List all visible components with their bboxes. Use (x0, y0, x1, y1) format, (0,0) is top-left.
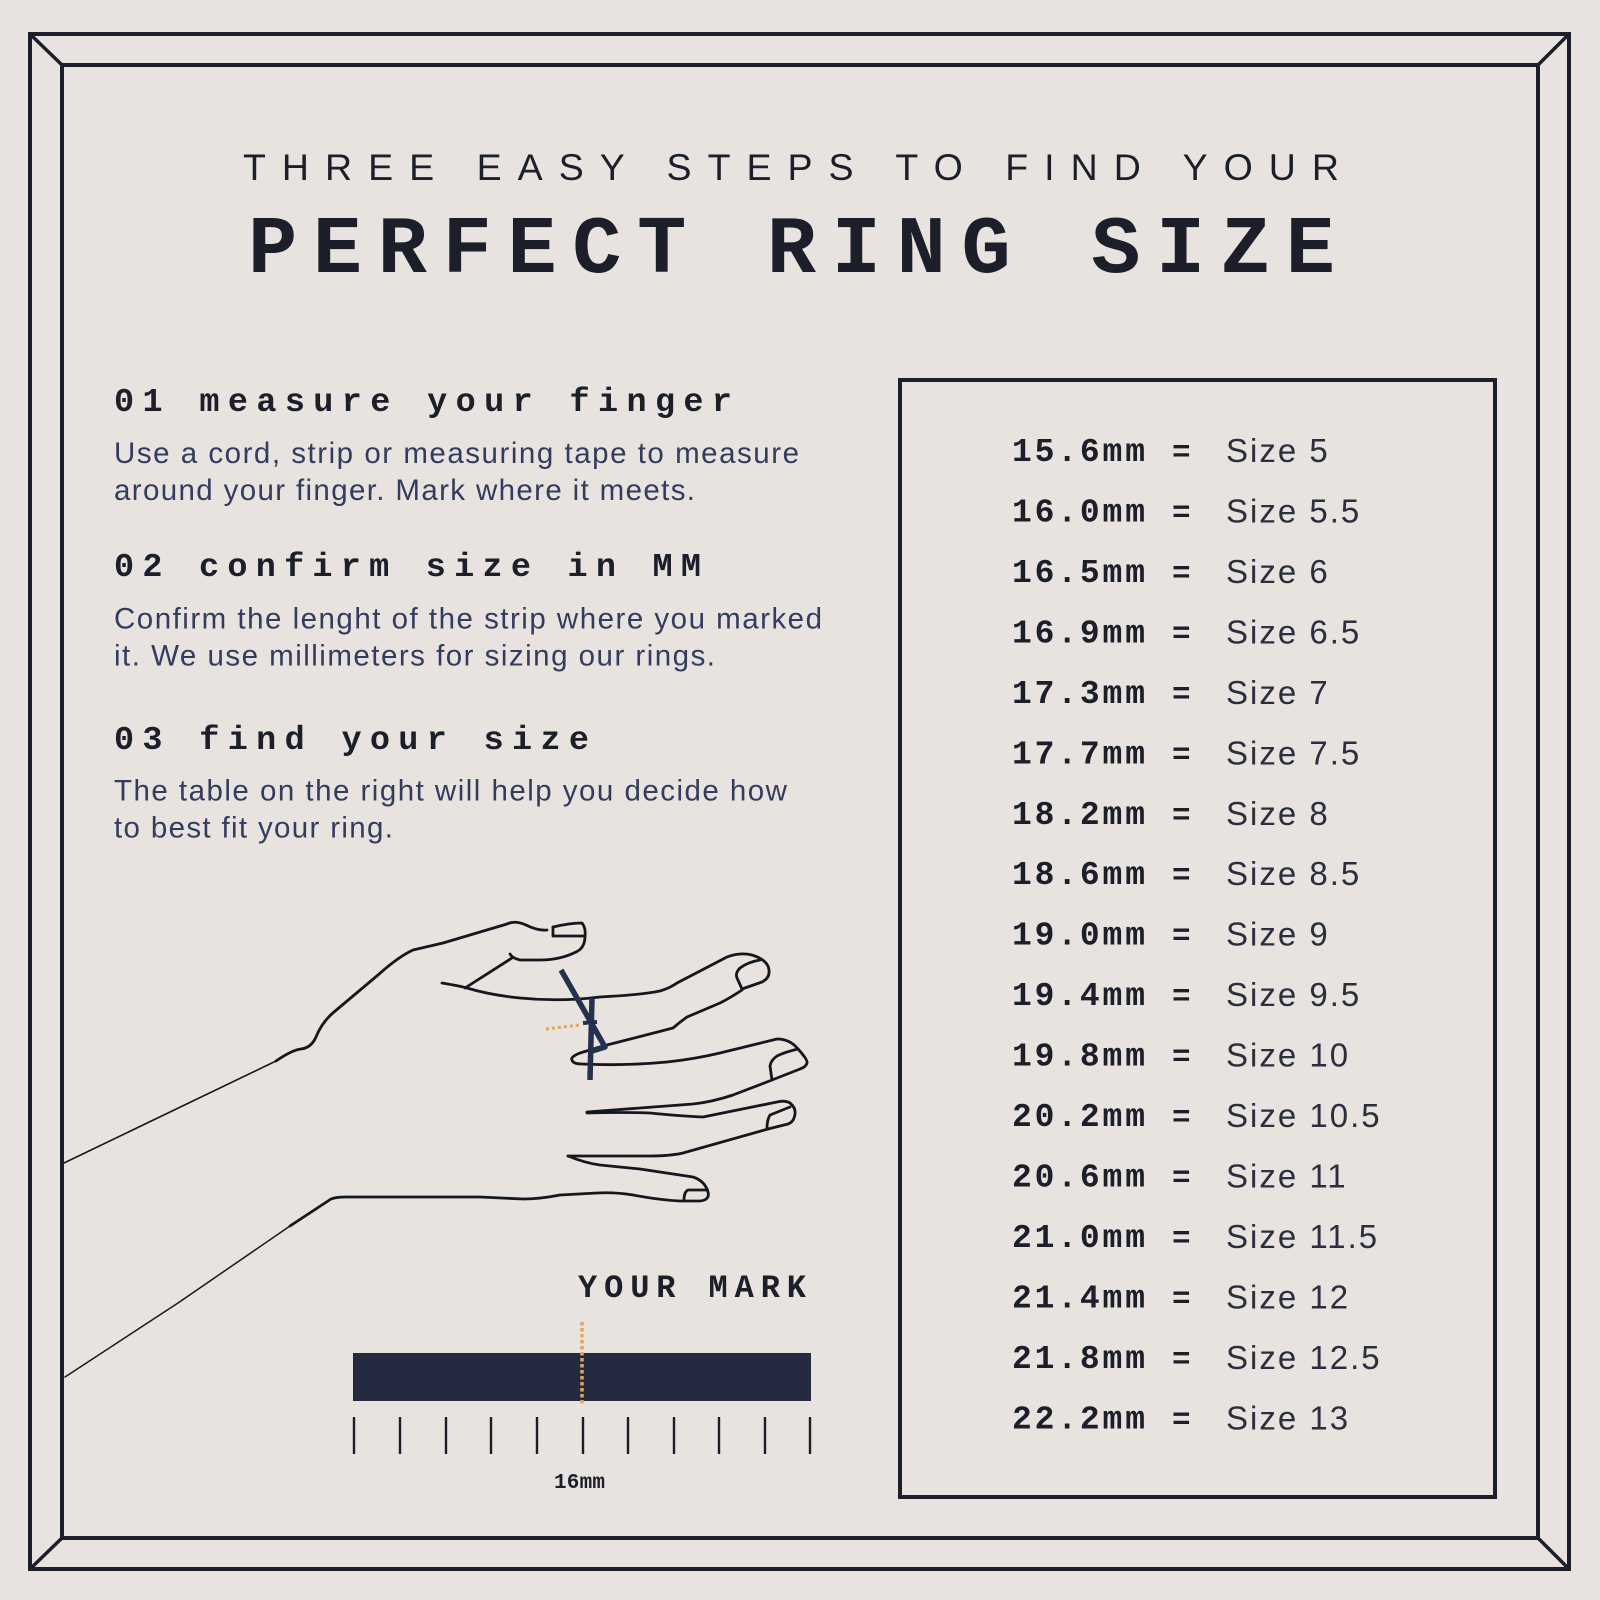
step 02 text: Confirm the lenght of the strip where you marked (114, 602, 822, 636)
step 01 (114, 384, 799, 507)
row: 18.2mm: = (1172, 799, 1191, 834)
row: 18.2mm (1012, 795, 1330, 834)
row: 22.2mm: = (1172, 1403, 1191, 1438)
row: 19.4mm: Size 9.5 (1226, 976, 1361, 1013)
row: 17.3mm: Size 7 (1226, 674, 1330, 711)
row: 19.8mm: 19.8mm (1012, 1039, 1145, 1076)
row: 20.6mm: 20.6mm (1012, 1160, 1145, 1196)
row: 18.2mm: Size 8 (1226, 795, 1330, 832)
main heading: PERFECT RING SIZE (248, 204, 1335, 297)
row: 17.3mm (1012, 674, 1330, 713)
ruler ticks (354, 1417, 810, 1454)
row: 20.6mm: Size 11 (1226, 1158, 1348, 1194)
row: 21.0mm: Size 11.5 (1226, 1218, 1379, 1255)
step 02 text line 2: it. We use millimeters for sizing our rings. (114, 640, 715, 672)
step 03 text: The table on the right will help you decide how (114, 774, 788, 808)
title (243, 146, 1339, 297)
row: 19.8mm: Size 10 (1226, 1037, 1350, 1074)
row: 21.0mm: = (1172, 1222, 1191, 1257)
row: 16.9mm: 16.9mm (1012, 615, 1145, 652)
row: 20.2mm: = (1172, 1101, 1191, 1136)
row: 22.2mm (1012, 1399, 1350, 1438)
row: 15.6mm: 15.6mm (1012, 434, 1145, 471)
row: 21.8mm (1012, 1339, 1382, 1378)
row: 21.0mm: 21.0mm (1012, 1220, 1145, 1257)
row: 20.2mm: Size 10.5 (1226, 1097, 1382, 1134)
row: 19.4mm: 19.4mm (1012, 978, 1145, 1015)
row: 18.6mm: = (1172, 859, 1191, 894)
row: 21.4mm (1012, 1278, 1350, 1317)
row: 15.6mm: = (1172, 436, 1191, 471)
row: 19.0mm (1012, 916, 1330, 955)
row: 16.5mm: Size 6 (1226, 553, 1330, 590)
step 01 text line 2: around your finger. Mark where it meets. (114, 474, 695, 507)
hand outline (64, 922, 807, 1377)
mark dots on finger (546, 1025, 580, 1029)
row: 16.0mm: 16.0mm (1012, 494, 1145, 532)
ruler label: 16mm (554, 1472, 605, 1495)
step 02 heading: 02 confirm size in MM (114, 549, 701, 587)
row: 15.6mm (1012, 432, 1330, 471)
measuring cord (561, 970, 605, 1080)
row: 17.3mm: = (1172, 678, 1191, 713)
step 02 (114, 549, 822, 672)
row: 16.0mm: = (1172, 496, 1191, 532)
row: 19.8mm: = (1172, 1041, 1191, 1076)
row: 18.6mm: Size 8.5 (1226, 855, 1361, 892)
strip with mark (353, 1322, 811, 1405)
row: 17.3mm: 17.3mm (1012, 676, 1145, 713)
row: 16.9mm (1012, 613, 1361, 652)
row: 16.5mm: = (1172, 557, 1191, 592)
row: 19.8mm (1012, 1037, 1350, 1076)
row: 20.6mm (1012, 1158, 1348, 1196)
row: 21.8mm: Size 12.5 (1226, 1339, 1382, 1376)
size table (900, 380, 1495, 1497)
row: 17.7mm (1012, 734, 1361, 773)
row: 22.2mm: Size 13 (1226, 1399, 1350, 1436)
hand illustration (64, 922, 807, 1377)
row: 21.8mm: = (1172, 1343, 1191, 1378)
row: 20.2mm (1012, 1097, 1382, 1136)
row: 19.4mm: = (1172, 980, 1191, 1015)
row: 19.4mm (1012, 976, 1361, 1015)
row: 20.2mm: 20.2mm (1012, 1099, 1145, 1136)
row: 18.6mm (1012, 855, 1361, 894)
row: 21.4mm: 21.4mm (1012, 1280, 1145, 1317)
dotted mark line (580, 1322, 584, 1405)
row: 19.0mm: Size 9 (1226, 916, 1330, 953)
step 01 text: Use a cord, strip or measuring tape to measure (114, 437, 799, 470)
step 01 heading: 01 measure your finger (114, 384, 732, 422)
row: 21.8mm: 21.8mm (1012, 1341, 1145, 1378)
row: 19.0mm: = (1172, 920, 1191, 955)
row: 17.7mm: = (1172, 738, 1191, 773)
row: 21.4mm: Size 12 (1226, 1278, 1350, 1315)
row: 15.6mm: Size 5 (1226, 432, 1330, 469)
step 03 (114, 722, 788, 844)
row: 16.0mm: Size 5.5 (1226, 492, 1361, 530)
row: 16.0mm (1012, 492, 1361, 532)
row: 16.5mm (1012, 553, 1330, 592)
row: 17.7mm: Size 7.5 (1226, 734, 1361, 771)
row: 16.5mm: 16.5mm (1012, 555, 1145, 592)
row: 17.7mm: 17.7mm (1012, 736, 1145, 773)
row: 20.6mm: = (1172, 1162, 1191, 1196)
row: 18.6mm: 18.6mm (1012, 857, 1145, 894)
row: 21.0mm (1012, 1218, 1379, 1257)
row: 18.2mm: 18.2mm (1012, 797, 1145, 834)
row: 16.9mm: Size 6.5 (1226, 613, 1361, 650)
row: 16.9mm: = (1172, 617, 1191, 652)
row: 22.2mm: 22.2mm (1012, 1401, 1145, 1438)
row: 19.0mm: 19.0mm (1012, 918, 1145, 955)
navy strip (353, 1353, 811, 1401)
step 03 text line 2: to best fit your ring. (114, 812, 393, 844)
your mark label: YOUR MARK (578, 1270, 807, 1307)
step 03 heading: 03 find your size (114, 722, 589, 760)
table border (900, 380, 1495, 1497)
row: 21.4mm: = (1172, 1282, 1191, 1317)
subtitle: THREE EASY STEPS TO FIND YOUR (243, 146, 1339, 188)
